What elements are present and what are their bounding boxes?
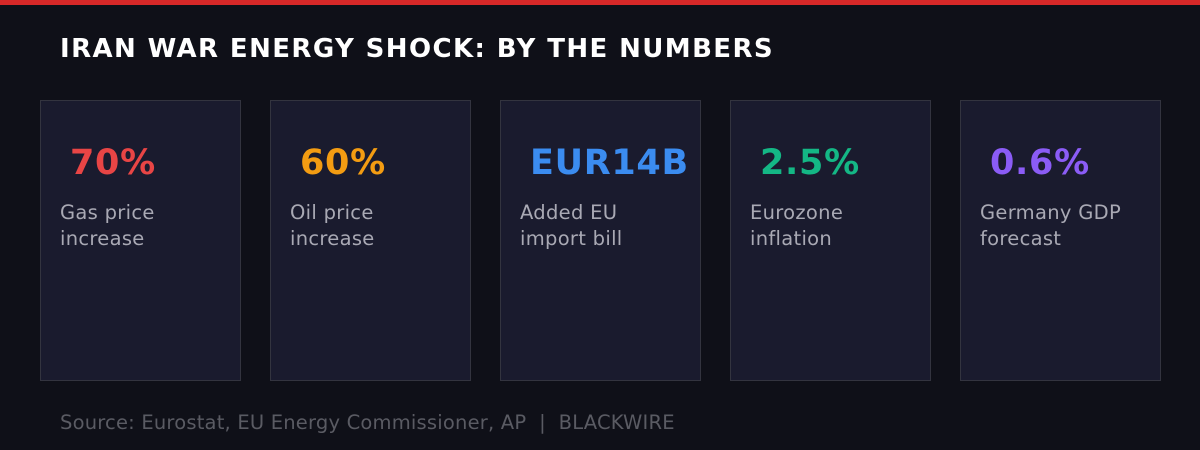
panel: import bill: EUR14B bbox=[530, 143, 689, 183]
panel: gdp: Germany GDP bbox=[980, 201, 1121, 224]
panel: inflation: 2.5% bbox=[760, 143, 860, 183]
panel: gas price bbox=[40, 100, 240, 380]
panel: gdp bbox=[960, 100, 1160, 380]
panel: inflation: Eurozone bbox=[750, 201, 843, 224]
panel: inflation bbox=[730, 100, 930, 380]
panel: gas price: Gas price bbox=[60, 201, 155, 224]
title: IRAN WAR ENERGY SHOCK: BY THE NUMBERS bbox=[60, 34, 774, 64]
panel: gas price: 70% bbox=[70, 143, 156, 183]
panel: gdp: 0.6% bbox=[990, 143, 1090, 183]
panel: oil price: increase bbox=[290, 227, 375, 250]
panel: gdp: forecast bbox=[980, 227, 1061, 250]
panel: import bill bbox=[500, 100, 700, 380]
panel: gas price: increase bbox=[60, 227, 145, 250]
source footer: Source: Eurostat, EU Energy Commissioner, AP | BLACKWIRE bbox=[60, 411, 675, 434]
panel: oil price: Oil price bbox=[290, 201, 374, 224]
panel: inflation: inflation bbox=[750, 227, 832, 250]
panel: import bill: Added EU bbox=[520, 201, 617, 224]
panel: oil price: 60% bbox=[300, 143, 386, 183]
panel: oil price bbox=[270, 100, 470, 380]
panel: import bill: import bill bbox=[520, 227, 623, 250]
